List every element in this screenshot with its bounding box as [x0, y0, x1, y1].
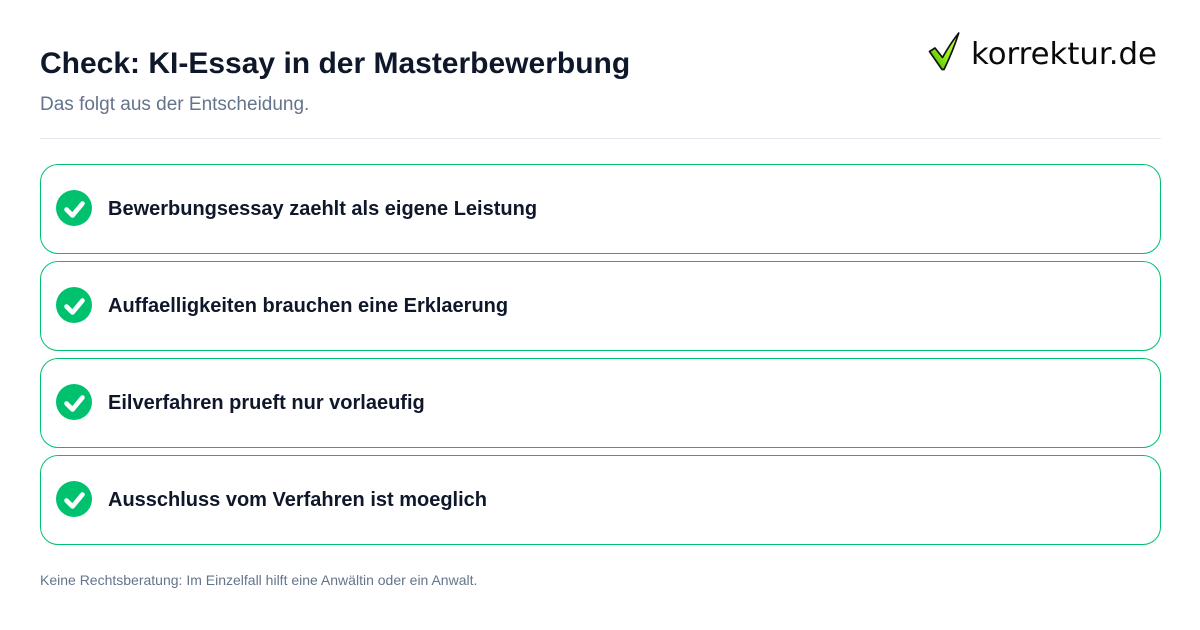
icon: check 1: [56, 190, 92, 226]
footer note: Keine Rechtsberatung: Im Einzelfall hilft eine Anwältin oder ein Anwalt.: [40, 572, 477, 588]
panel: check item 2: [40, 261, 1161, 351]
panel: check item 1: Bewerbungsessay zaehlt als eigene Leistung: [108, 198, 537, 220]
icon: check 3: [56, 384, 92, 420]
panel: check item 2: Auffaelligkeiten brauchen eine Erklaerung: [108, 295, 508, 317]
panel: check item 3: [40, 358, 1161, 448]
panel: check item 3: Eilverfahren prueft nur vorlaeufig: [108, 392, 425, 414]
logo: korrektur.de: [928, 32, 1157, 72]
title: Check: KI-Essay in der Masterbewerbung: [40, 47, 630, 80]
panel: check item 4: Ausschluss vom Verfahren ist moeglich: [108, 489, 487, 511]
subtitle: Das folgt aus der Entscheidung.: [40, 94, 309, 115]
icon: check 2: [56, 287, 92, 323]
panel: check item 1: [40, 164, 1161, 254]
logo: korrektur.de: korrektur.de: [971, 37, 1157, 72]
panel: check item 4: [40, 455, 1161, 545]
icon: check 4: [56, 481, 92, 517]
divider: [40, 138, 1161, 139]
